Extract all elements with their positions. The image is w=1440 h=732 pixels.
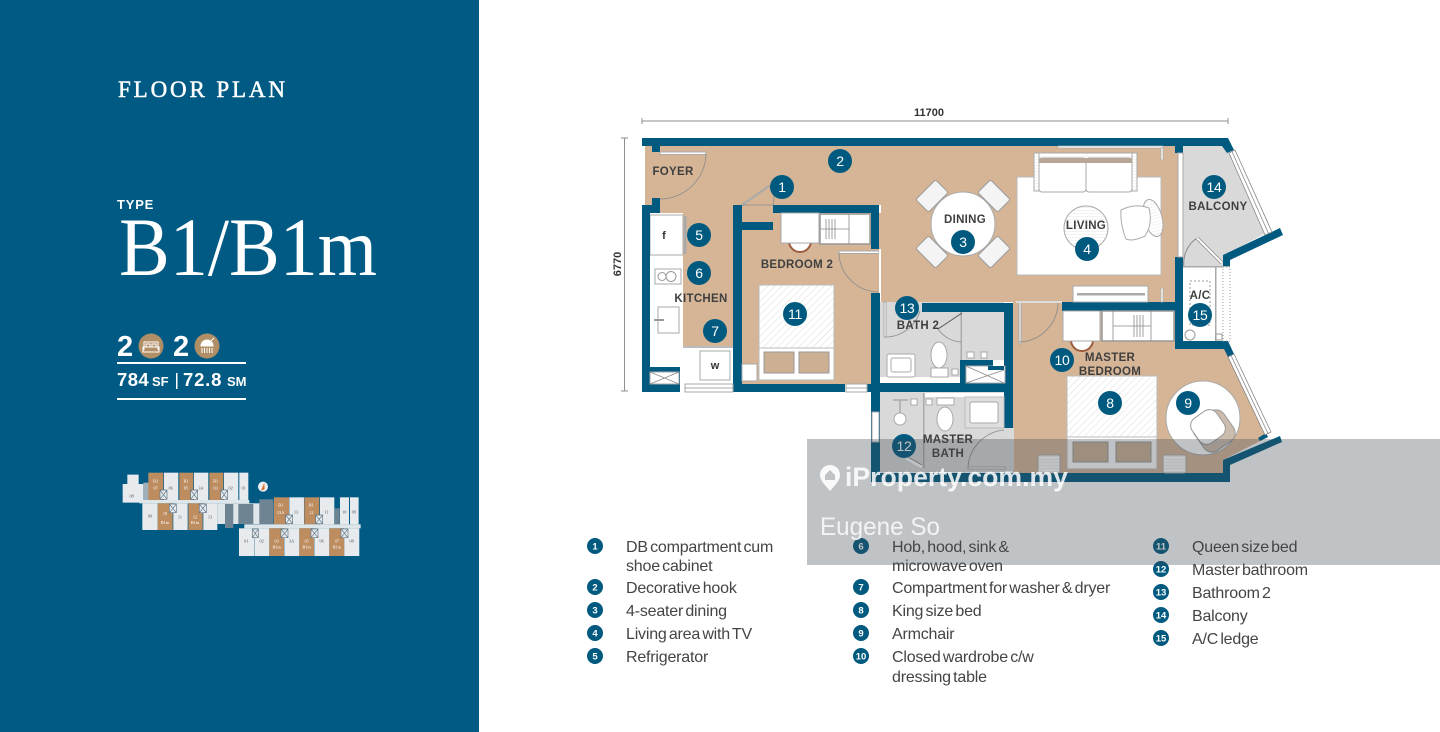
key plan: 05: [304, 539, 309, 544]
area summary: [117, 362, 246, 400]
key plan: 03: [213, 485, 218, 490]
curtain rails: [1058, 146, 1163, 302]
legend column 2: 7: [858, 582, 864, 594]
legend: [587, 538, 1308, 686]
legend column 3: [1153, 538, 1308, 648]
key plan: B1: [183, 478, 189, 483]
label: type: TYPE: [117, 197, 154, 212]
key plan: 13: [208, 514, 212, 519]
dimension: width 11700: [642, 107, 1228, 124]
kitchen counter: f: [662, 230, 666, 242]
plan number markers: 5: [695, 227, 703, 243]
key plan: 10: [342, 509, 346, 514]
bathroom count and icon: [173, 331, 220, 363]
living armchair: [1121, 197, 1167, 240]
bath 2 fixtures: [880, 302, 1005, 383]
watermark agent name: Eugene So: [820, 513, 940, 541]
plan number markers: 11: [788, 306, 802, 322]
key plan: B1m: [191, 520, 200, 525]
room labels: [652, 166, 1248, 460]
key plan: 13A: [277, 510, 285, 515]
legend column 1: Refrigerator: [626, 649, 709, 666]
plan number markers: 4: [1083, 241, 1091, 257]
key plan: B1m: [161, 520, 170, 525]
legend column 3: Master bathroom: [1192, 562, 1308, 579]
key plan: 10: [163, 511, 167, 516]
plan number markers: [687, 149, 1226, 458]
legend column 2: Compartment for washer & dryer: [892, 580, 1111, 597]
dimension: depth 6770: 6770: [612, 252, 624, 276]
key plan: 05: [184, 485, 188, 490]
legend column 3: Bathroom 2: [1192, 585, 1271, 602]
floor: balcony: [1183, 146, 1266, 267]
plan number markers: 12: [897, 438, 912, 454]
legend column 2: Closed wardrobe c/w: [892, 649, 1034, 666]
key plan: 07: [335, 539, 340, 544]
legend column 3: 11: [1156, 542, 1167, 552]
A/C ledge: [1183, 266, 1230, 341]
key plan: 02: [228, 485, 233, 490]
legend column 2: 10: [856, 652, 866, 662]
key plan: B1m: [302, 545, 311, 550]
dimension: depth 6770: [612, 138, 628, 391]
king bed: [1038, 376, 1186, 473]
legend column 2: [853, 538, 1111, 686]
door: master bedroom: [1016, 301, 1062, 344]
key plan: 3A: [289, 539, 295, 544]
room labels: MASTER: [1085, 352, 1136, 364]
bedroom 2 wardrobe and dressing table: [781, 213, 870, 252]
bedroom count and icon: 2: [117, 331, 133, 363]
key plan: B1m: [333, 545, 342, 550]
area summary: 784: [117, 369, 149, 390]
key plan: 12: [309, 510, 313, 515]
plan number markers: 13: [900, 300, 915, 316]
legend column 2: 9: [858, 628, 864, 640]
dining table and chairs: [916, 180, 1010, 268]
room labels: BATH: [932, 448, 964, 460]
plan number markers: 8: [1106, 395, 1114, 411]
walls: [642, 138, 1283, 482]
plan number markers: 15: [1193, 307, 1208, 323]
kitchen counter: w: [710, 360, 720, 372]
living coffee table: [1064, 206, 1108, 250]
legend column 3: 15: [1156, 634, 1167, 644]
left panel: [0, 0, 479, 732]
legend column 2: 8: [858, 606, 864, 616]
legend column 1: 3: [592, 606, 598, 616]
key plan: 3A: [198, 485, 205, 490]
legend column 1: 1: [592, 542, 598, 552]
key plan: 03: [274, 539, 279, 544]
bedroom count and icon: [117, 331, 164, 363]
room labels: DINING: [944, 214, 986, 226]
floor: bedroom 2: [742, 205, 882, 384]
shaft: [650, 372, 679, 384]
key plan: B1: [309, 503, 314, 508]
window: bedroom 2: [846, 384, 867, 392]
plan number markers: 3: [959, 234, 967, 250]
window: master bedroom: [1228, 354, 1271, 435]
legend column 2: 6: [858, 542, 864, 552]
door: DB compartment: [742, 186, 774, 205]
key plan: 02: [259, 539, 264, 544]
area summary: SM: [227, 374, 246, 389]
room labels: KITCHEN: [674, 293, 728, 305]
TV console: [1073, 286, 1148, 302]
legend column 3: 12: [1156, 564, 1166, 576]
watermark site name: iProperty.com.my: [845, 462, 1068, 492]
watermark band: [807, 439, 1440, 565]
legend column 1: 5: [592, 652, 598, 662]
key plan: 08: [349, 539, 354, 544]
legend column 1: Living area with TV: [626, 626, 753, 643]
master wardrobe and dressing table: [1063, 311, 1174, 351]
legend column 1: Decorative hook: [626, 580, 738, 597]
armchair in master bedroom: [1166, 381, 1240, 456]
floor: foyer, living, kitchen: [645, 146, 1178, 347]
legend column 3: A/C ledge: [1192, 631, 1259, 648]
room labels: A/C: [1190, 290, 1210, 302]
key plan: 06: [319, 539, 325, 544]
key plan: 07: [153, 485, 159, 490]
key plan: 12: [193, 514, 197, 519]
key plan: 11: [178, 514, 182, 519]
plan number markers: 2: [836, 153, 844, 169]
key plan: 06: [168, 485, 174, 490]
plan number markers: 1: [778, 179, 786, 195]
key plan: 01: [244, 539, 248, 544]
dimension: width 11700: 11700: [914, 107, 944, 119]
legend column 2: King size bed: [892, 603, 981, 620]
foyer stubs: [652, 146, 660, 206]
legend column 2: microwave oven: [892, 558, 1003, 575]
legend column 2: dressing table: [892, 669, 987, 686]
legend column 1: [587, 538, 773, 666]
area summary: 72.8: [183, 369, 222, 390]
legend column 3: Queen size bed: [1192, 539, 1297, 556]
plan number markers: 7: [711, 323, 719, 339]
kitchen counter: [650, 213, 733, 384]
key plan: [123, 473, 361, 556]
key plan: 09: [352, 509, 356, 514]
plan number markers: 6: [695, 265, 703, 281]
room labels: BEDROOM: [1079, 366, 1141, 378]
key plan: 11: [325, 509, 329, 514]
room labels: FOYER: [652, 166, 694, 178]
area summary: SF: [152, 374, 169, 389]
queen bed: [742, 285, 834, 381]
key plan: B1: [213, 478, 218, 483]
legend column 2: Armchair: [892, 626, 955, 643]
plan number markers: 10: [1055, 352, 1070, 368]
floor: bathrooms: [880, 302, 1014, 472]
window: living to balcony: [1178, 153, 1183, 257]
legend column 1: 4: [592, 628, 598, 640]
heading: unit type: B1/B1m: [119, 201, 377, 293]
legend column 2: Hob, hood, sink &: [892, 539, 1009, 556]
legend column 1: shoe cabinet: [626, 558, 713, 575]
living rug and sofa: [1017, 153, 1161, 275]
door: bedroom 2: [839, 249, 881, 293]
window: balcony: [1229, 150, 1272, 235]
room labels: MASTER: [923, 434, 974, 446]
room labels: BATH 2: [897, 320, 939, 332]
window: kitchen: [685, 384, 733, 392]
key plan: B1m: [272, 545, 281, 550]
watermark logo pin: [820, 465, 840, 491]
key plan: 13: [294, 509, 298, 514]
floor plan: [642, 138, 1283, 482]
key plan: B1: [278, 503, 283, 508]
room labels: LIVING: [1066, 220, 1106, 232]
key plan: 01: [241, 485, 246, 490]
plan number markers: 14: [1207, 179, 1222, 195]
key plan: 09: [148, 513, 152, 518]
bathroom count and icon: 2: [173, 331, 189, 363]
room labels: BEDROOM 2: [761, 259, 833, 271]
legend column 1: 2: [592, 582, 598, 594]
legend column 3: 14: [1156, 610, 1167, 622]
room labels: BALCONY: [1189, 201, 1248, 213]
legend column 1: 4-seater dining: [626, 603, 727, 620]
plan number markers: 9: [1184, 395, 1192, 411]
master bath fixtures: [872, 393, 1005, 469]
heading: floor plan: FLOOR PLAN: [118, 77, 285, 102]
door: foyer: [660, 152, 706, 199]
balcony door: [1184, 238, 1222, 267]
legend column 3: Balcony: [1192, 608, 1248, 625]
legend column 1: DB compartment cum: [626, 539, 773, 556]
legend column 3: 13: [1156, 588, 1166, 598]
key plan: 08: [130, 493, 134, 498]
key plan: B1: [153, 478, 158, 483]
floor: master bedroom: [1013, 302, 1266, 473]
